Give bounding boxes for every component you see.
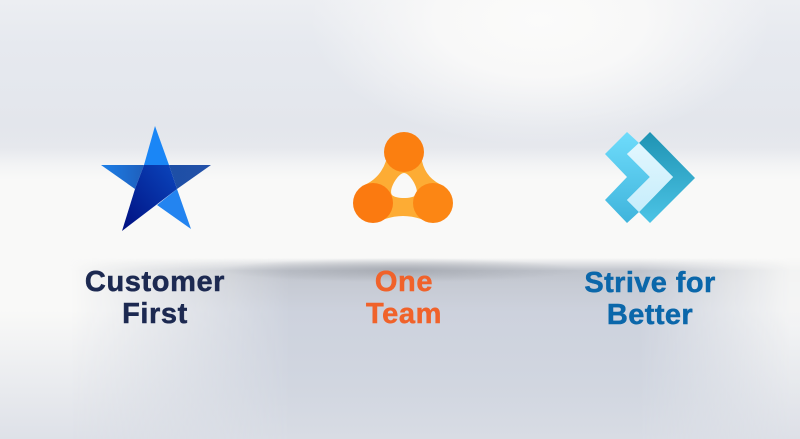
heading: Strive for Better: Better [607, 299, 693, 331]
heading: Customer First: Customer [85, 266, 225, 298]
icon: double chevron [605, 132, 695, 223]
heading: Customer First [85, 266, 225, 330]
heading: Strive for Better: Strive for [584, 267, 716, 299]
heading: One Team: Team [366, 298, 442, 330]
heading: Customer First: First [122, 298, 188, 330]
heading: One Team [366, 266, 442, 330]
icon: star [101, 126, 211, 231]
icon: three connected circles [353, 132, 453, 223]
heading: Strive for Better [584, 267, 716, 331]
heading: One Team: One [375, 266, 433, 298]
